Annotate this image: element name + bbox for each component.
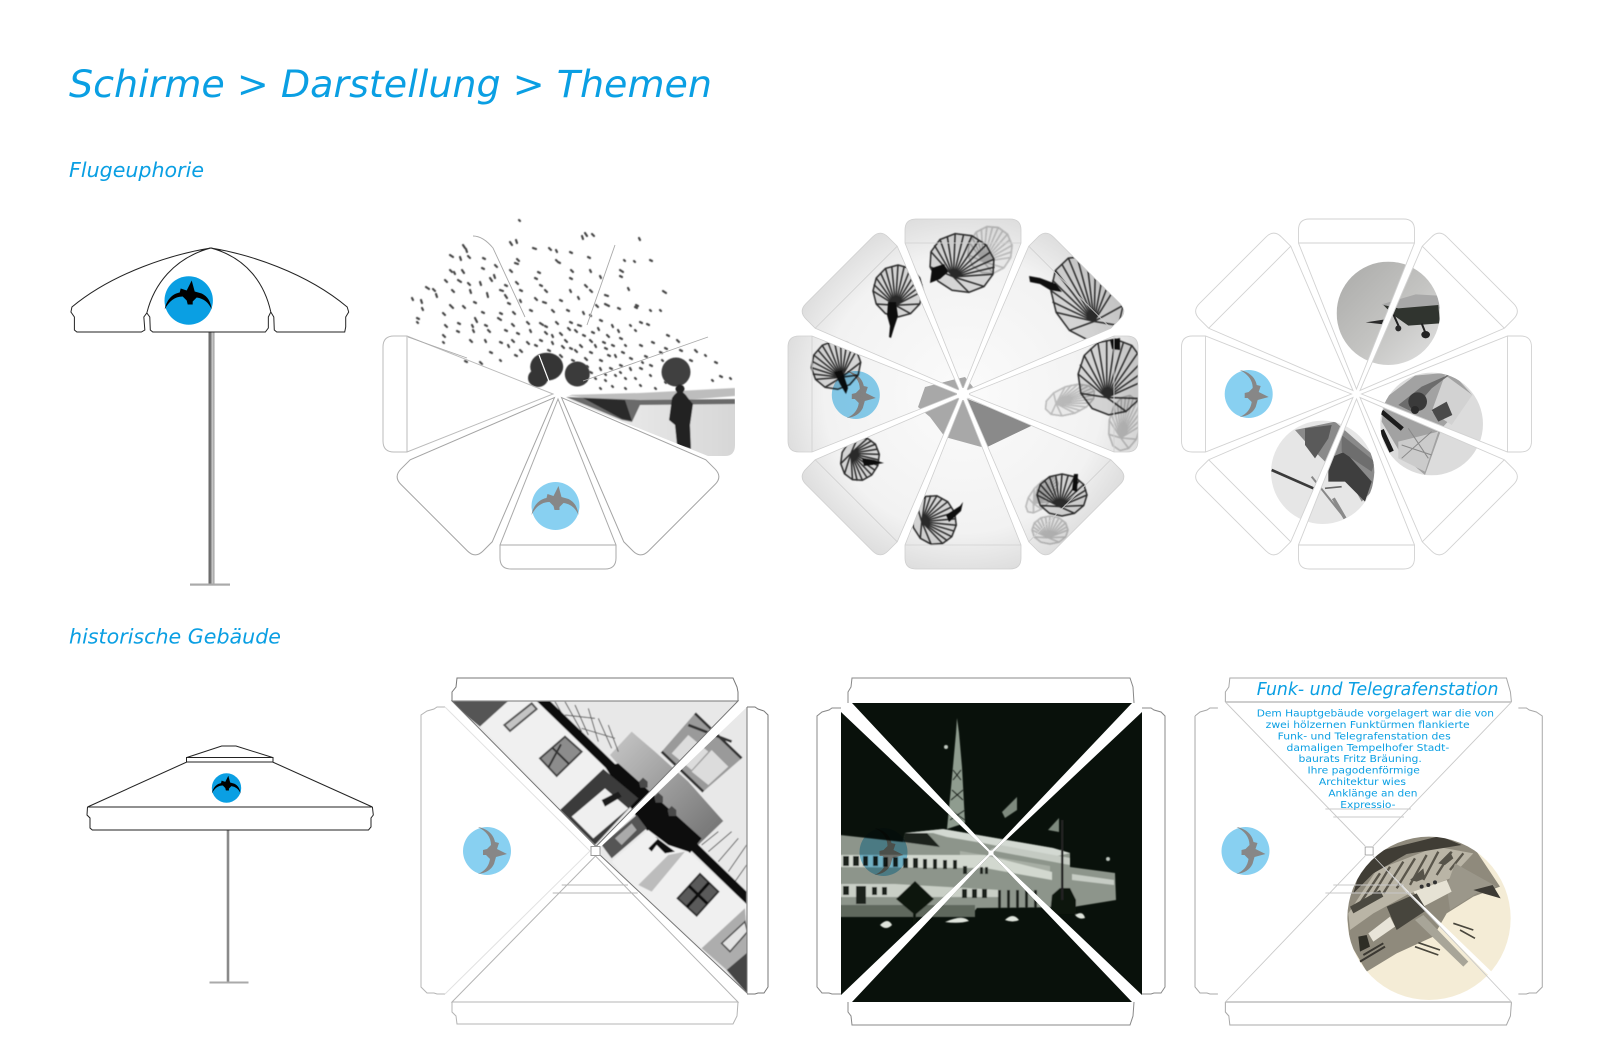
photo: airfield detail (1380, 372, 1483, 476)
body text: Expressio- (1340, 800, 1396, 811)
octagonal umbrella side view (71, 248, 349, 586)
umbrella canopy (87, 746, 373, 830)
center hub (591, 846, 600, 856)
body text: Dem Hauptgebäude vorgelagert war die von (1257, 708, 1494, 720)
photo: field and spectator (566, 384, 735, 456)
photo: swarm of birds (412, 220, 731, 389)
slit across the photo (1382, 865, 1510, 993)
panel outlines (452, 678, 768, 994)
square umbrella side view (87, 746, 373, 984)
lower and left panels (421, 707, 738, 1024)
octagon pattern: flying machines photo (788, 218, 1138, 570)
body text: zwei hölzernen Funktürmen flankierte (1266, 720, 1470, 731)
body text: Funk- und Telegrafenstation des (1278, 731, 1451, 743)
photo: building (453, 702, 746, 992)
square pattern: night photo of the building (817, 678, 1165, 1025)
faint left triangle (445, 707, 590, 994)
inner panel lines (1225, 702, 1511, 1002)
photo circles (1270, 262, 1483, 525)
square pattern: building photo (421, 678, 768, 1024)
panel outlines (817, 678, 1165, 1025)
body text: Architektur wies (1319, 777, 1406, 788)
outlines and text (1195, 678, 1542, 1025)
logo (463, 827, 511, 875)
photo: radio tower and building at night (840, 700, 1145, 1005)
body text (1257, 708, 1494, 811)
logo (1222, 827, 1270, 875)
center hub (988, 850, 994, 856)
center hole (957, 388, 969, 400)
body text: damaligen Tempelhofer Stadt- (1287, 743, 1449, 754)
logo (832, 371, 880, 419)
aerial photo (1345, 835, 1513, 1003)
upper panel seams (408, 236, 708, 381)
panel outlines (383, 336, 723, 569)
thick tab folds (1225, 702, 1511, 1002)
umbrella canopy (71, 248, 349, 332)
logo (212, 773, 241, 803)
photo: panels with parachute gliders (788, 220, 1138, 568)
logo (532, 482, 580, 530)
photo: aircraft (1337, 262, 1440, 365)
square pattern: radio station text and aerial photo (1195, 678, 1542, 1025)
umbrella pole (190, 332, 230, 586)
octagon pattern: bird swarm photo (383, 220, 740, 569)
panel outlines (1182, 219, 1532, 569)
body text: Ihre pagodenförmige (1307, 765, 1420, 777)
heading: historische Gebäude: historische Gebäude (69, 624, 281, 648)
center hub (1365, 847, 1373, 855)
fold lines (788, 219, 1138, 569)
octagon pattern: aircraft photos in circles (1182, 219, 1532, 569)
body text: Anklänge an den (1328, 788, 1417, 800)
heading: Flugeuphorie: Flugeuphorie (69, 158, 204, 182)
umbrella pole (210, 830, 248, 984)
photo: balloons (528, 353, 690, 387)
logo (860, 828, 908, 876)
panel outlines (1195, 678, 1542, 1025)
logo (1225, 370, 1273, 418)
title: Schirme > Darstellung > Themen (69, 63, 712, 106)
logo (164, 276, 213, 325)
photo: biplane from above (1270, 420, 1377, 525)
body text: baurats Fritz Bräuning. (1298, 754, 1422, 765)
heading: Funk- und Telegrafenstation: Funk- und Telegrafenstation (1257, 679, 1498, 700)
balloon seam (539, 355, 550, 384)
